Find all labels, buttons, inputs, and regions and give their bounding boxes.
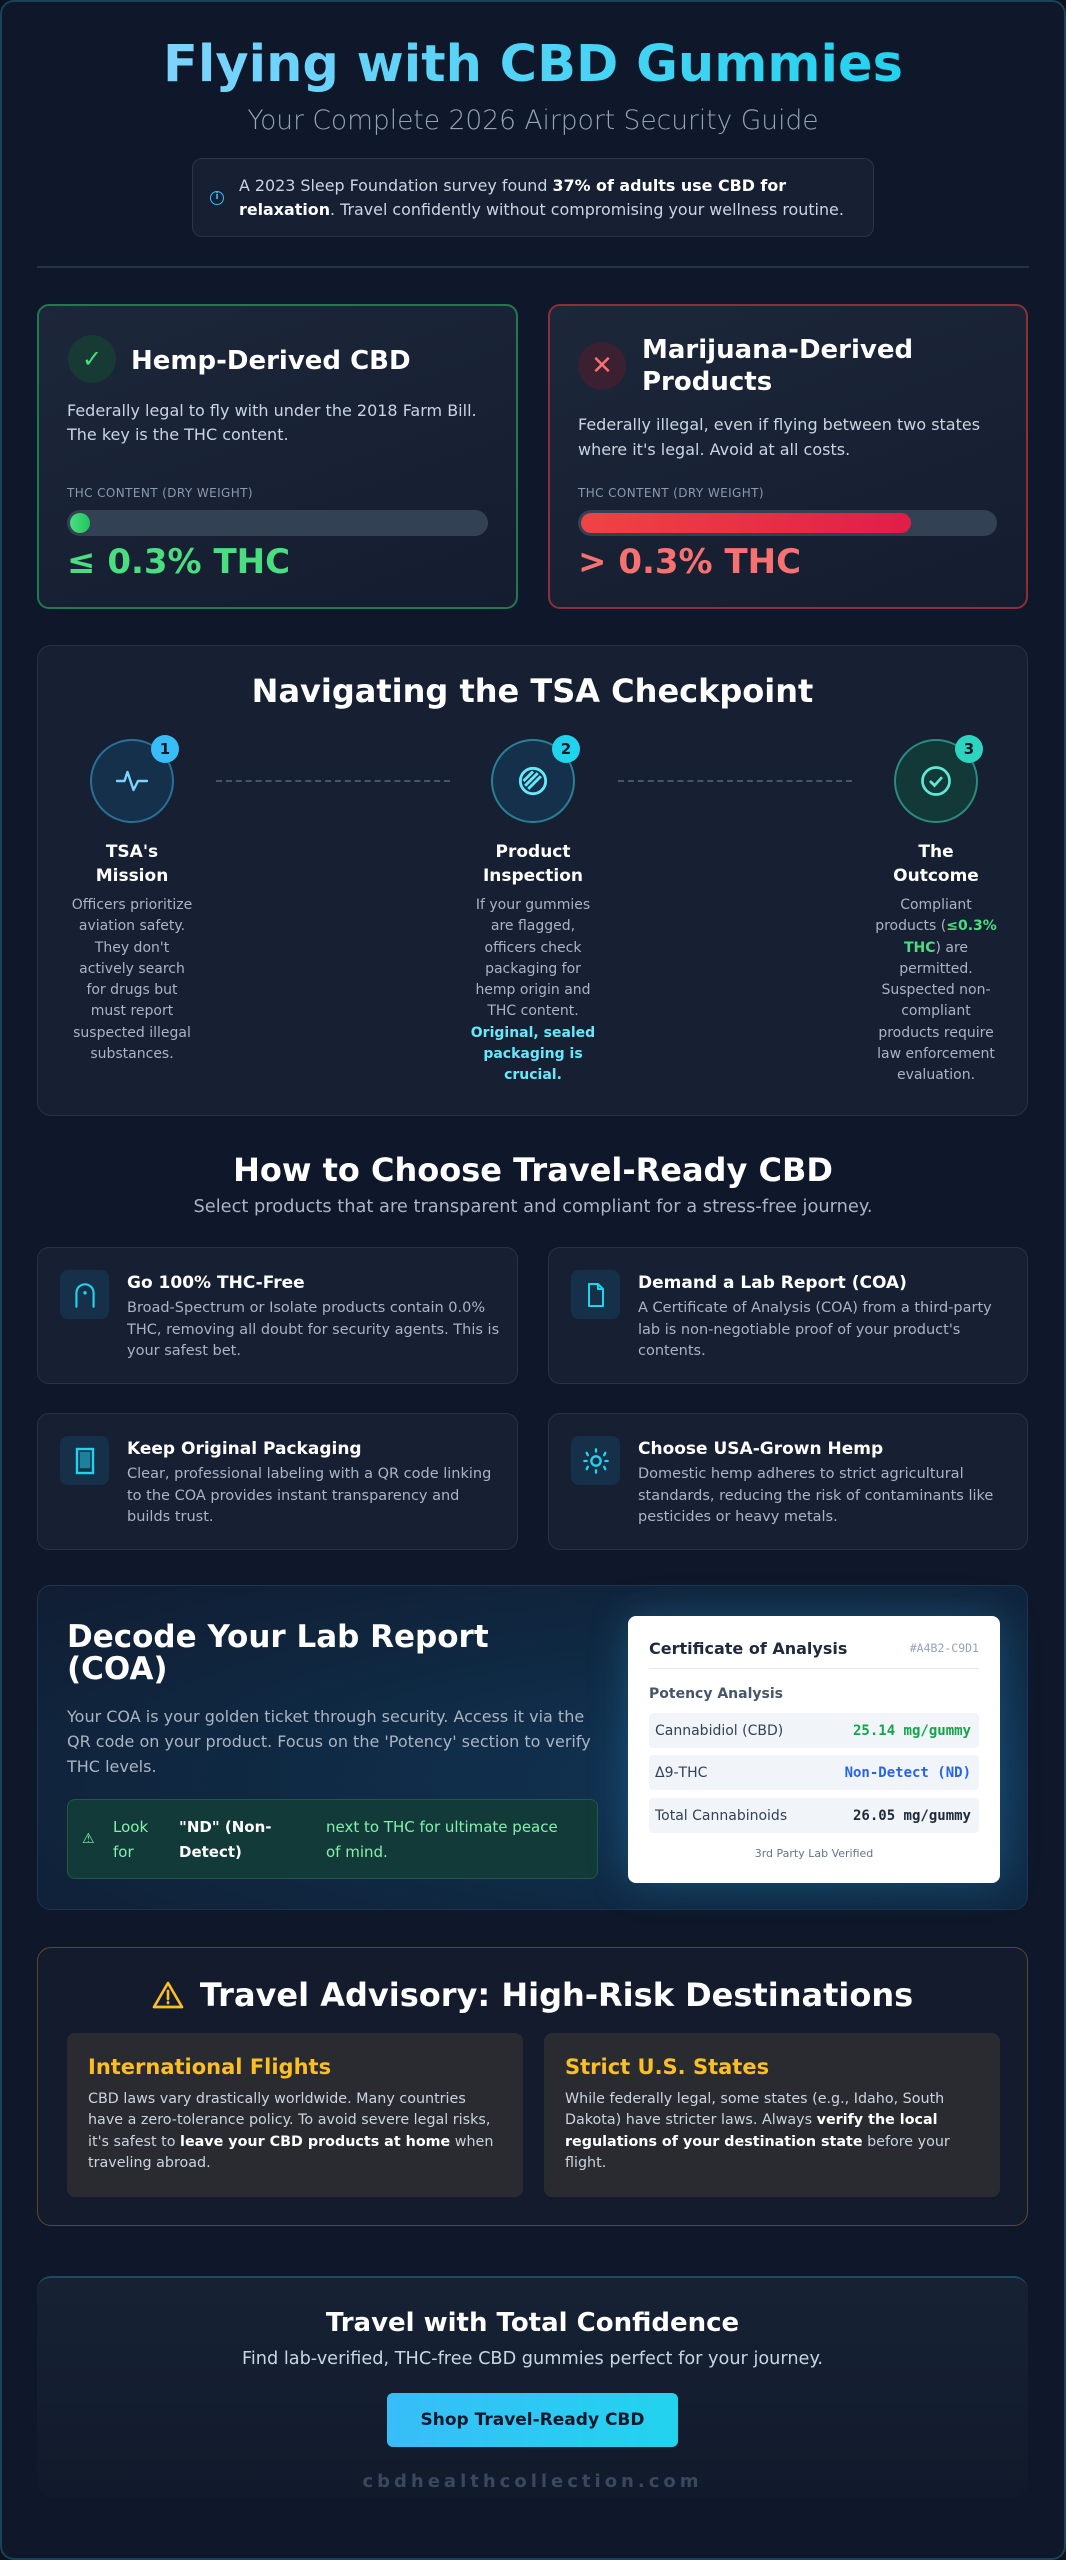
text: QR code on your product. Focus on the 'Potency' section to verify: [67, 1732, 591, 1751]
text: builds trust.: [127, 1509, 214, 1525]
icon: check circle: [894, 739, 978, 823]
step text: They don't: [95, 940, 169, 956]
text: A Certificate of Analysis (COA) from a third-party: [638, 1300, 992, 1316]
subheading: Select products that are transparent and compliant for a stress-free journey.: [193, 1196, 872, 1217]
card: packaging: [37, 1413, 518, 1550]
title: Demand a Lab Report (COA): [638, 1273, 907, 1293]
step text: suspected illegal: [73, 1025, 191, 1041]
icon: check: [68, 335, 116, 383]
badge 2: [552, 735, 580, 763]
callout: ND: "ND" (Non-: [179, 1818, 271, 1836]
text: lab is non-negotiable proof of your product's: [638, 1322, 960, 1338]
step 3: [875, 735, 997, 1083]
button: Shop Travel-Ready CBD: [420, 2410, 644, 2430]
heading: [67, 1619, 489, 1686]
info text: relaxation. Travel confidently without compromising your wellness routine.: [239, 200, 844, 219]
label: THC CONTENT (DRY WEIGHT): [67, 486, 253, 500]
label: THC CONTENT (DRY WEIGHT): [578, 486, 764, 500]
badge 3: [955, 735, 983, 763]
step text: Original, sealed: [471, 1025, 595, 1041]
box: strict states: Strict U.S. States: [565, 2055, 769, 2079]
box: strict states: Dakota) have stricter laws. Always verify the local: [565, 2112, 938, 2128]
COA card: 26.05 mg/gummy: [853, 1808, 971, 1824]
step text: THC content.: [487, 1003, 579, 1019]
panel: TSA checkpoint: [37, 645, 1028, 1116]
step text: products (≤0.3%: [875, 918, 997, 934]
value: > 0.3% THC: [578, 542, 801, 582]
step text: packaging for: [485, 961, 581, 977]
icon: inspection: [491, 739, 575, 823]
heading: Decode Your Lab Report: [67, 1619, 489, 1655]
step text: [72, 897, 192, 1062]
icon: info: i: [215, 192, 219, 202]
text: your safest bet.: [127, 1343, 241, 1359]
step text: Compliant: [900, 897, 972, 913]
panel: call to action: [37, 2276, 1028, 2497]
COA card: Cannabidiol (CBD): [655, 1722, 783, 1738]
step 2: [471, 735, 595, 1083]
text: [638, 1300, 992, 1359]
step title: Product: [496, 842, 570, 862]
text: Domestic hemp adheres to strict agricultural: [638, 1466, 964, 1482]
COA card: Certificate of Analysis: [649, 1639, 847, 1658]
badge 1: 1: [160, 740, 170, 758]
icon: [60, 1436, 109, 1485]
text: Find lab-verified, THC-free CBD gummies perfect for your journey.: [242, 2349, 823, 2369]
icon: warning: [152, 1982, 184, 2008]
step text: Suspected non-: [881, 982, 991, 998]
text: contents.: [638, 1343, 706, 1359]
step text: [471, 897, 595, 1083]
COA card: [628, 1616, 1000, 1883]
COA card: Non-Detect (ND): [845, 1764, 971, 1780]
box: international: traveling abroad.: [88, 2155, 211, 2171]
title: Keep Original Packaging: [127, 1439, 362, 1459]
text: where it's legal. Avoid at all costs.: [578, 440, 850, 459]
icon: check: ✓: [82, 345, 102, 373]
value: ≤ 0.3% THC: [67, 542, 290, 582]
step text: THC) are: [904, 940, 968, 956]
callout: ND: Look: [113, 1818, 148, 1836]
box: international: International Flights: [88, 2055, 331, 2079]
panel: decode lab report: [37, 1585, 1028, 1910]
callout: ND: [67, 1799, 598, 1879]
callout: ND: of mind.: [326, 1843, 388, 1861]
arrow: dashed 1: [216, 780, 450, 782]
box: international: have a zero-tolerance policy. To avoid severe legal risks,: [88, 2112, 490, 2128]
title: Go 100% THC-Free: [127, 1273, 305, 1293]
box: international: CBD laws vary drastically worldwide. Many countries: [88, 2091, 466, 2107]
COA card: 3rd Party Lab Verified: [755, 1847, 873, 1860]
step title: [483, 842, 583, 886]
text: Clear, professional labeling with a QR code linking: [127, 1466, 491, 1482]
box: strict states: flight.: [565, 2155, 606, 2171]
subtitle: Your Complete 2026 Airport Security Guide: [247, 105, 819, 136]
text: Your COA is your golden ticket through security. Access it via the: [67, 1707, 584, 1726]
step text: Officers prioritize: [72, 897, 192, 913]
step text: evaluation.: [897, 1067, 975, 1083]
heading: Travel Advisory: High-Risk Destinations: [200, 1976, 913, 2014]
step title: TSA's: [106, 842, 158, 862]
panel: travel advisory: [37, 1947, 1028, 2226]
step text: packaging is: [483, 1046, 583, 1062]
COA card: 25.14 mg/gummy: [853, 1722, 971, 1738]
heading: [642, 335, 913, 397]
card: lab report: [548, 1247, 1028, 1384]
step text: substances.: [90, 1046, 174, 1062]
step text: are flagged,: [491, 918, 575, 934]
step text: for drugs but: [86, 982, 178, 998]
text: to the COA provides instant transparency and: [127, 1488, 459, 1504]
badge 2: 2: [561, 740, 571, 758]
heading: Hemp-Derived CBD: [131, 346, 411, 376]
step text: [875, 897, 997, 1083]
icon: [571, 1436, 620, 1485]
box: strict states: [544, 2033, 1000, 2197]
icon: warning: ⚠: [82, 1831, 95, 1847]
step text: officers check: [485, 940, 581, 956]
bar: thc high: [578, 510, 997, 536]
info text: A 2023 Sleep Foundation survey found 37% of adults use CBD for: [239, 176, 786, 195]
COA card: Total Cannabinoids: [655, 1808, 787, 1824]
box: international: [67, 2033, 523, 2197]
COA card: #A4B2-C9D1: [910, 1641, 979, 1655]
step title: Outcome: [893, 866, 979, 886]
step title: [96, 842, 168, 886]
text: [127, 1466, 491, 1525]
step title: [893, 842, 979, 886]
icon: x: ✕: [591, 351, 613, 381]
box: strict states: While federally legal, some states (e.g., Idaho, South: [565, 2091, 944, 2107]
icon: [571, 1270, 620, 1319]
step text: aviation safety.: [79, 918, 185, 934]
heading: Marijuana-Derived: [642, 335, 913, 365]
panel: hemp-derived CBD: [37, 304, 518, 609]
box: strict states: regulations of your destination state before your: [565, 2134, 950, 2150]
card: THC-free: [37, 1247, 518, 1384]
text: [638, 1466, 993, 1525]
text: Federally illegal, even if flying between two states: [578, 415, 980, 434]
text: Broad-Spectrum or Isolate products contain 0.0%: [127, 1300, 485, 1316]
text: pesticides or heavy metals.: [638, 1509, 838, 1525]
step text: permitted.: [899, 961, 973, 977]
heading: how to choose: How to Choose Travel-Ready CBD: [233, 1151, 833, 1189]
text: THC, removing all doubt for security agents. This is: [127, 1322, 499, 1338]
step title: Inspection: [483, 866, 583, 886]
icon: info: [210, 191, 224, 205]
COA card: Δ9-THC: [655, 1764, 707, 1780]
heading: Products: [642, 367, 772, 397]
info text: [239, 176, 844, 219]
step text: crucial.: [504, 1067, 562, 1083]
step text: hemp origin and: [475, 982, 591, 998]
title: Flying with CBD Gummies: [163, 35, 903, 94]
step text: actively search: [79, 961, 185, 977]
text: standards, reducing the risk of contaminants like: [638, 1488, 993, 1504]
icon: [60, 1270, 109, 1319]
step title: The: [918, 842, 954, 862]
COA card: Potency Analysis: [649, 1686, 783, 1702]
step title: Mission: [96, 866, 168, 886]
callout: ND: next to THC for ultimate peace: [326, 1818, 558, 1836]
text: [66, 1707, 591, 1776]
panel: marijuana-derived: [548, 304, 1028, 609]
text: The key is the THC content.: [67, 425, 289, 444]
text: Federally legal to fly with under the 2018 Farm Bill.: [67, 401, 477, 420]
bar: thc low: [67, 510, 488, 536]
button: [387, 2393, 678, 2447]
heading: (COA): [67, 1650, 168, 1686]
step text: If your gummies: [476, 897, 590, 913]
icon: pulse: [90, 739, 174, 823]
text: THC levels.: [67, 1757, 157, 1776]
card: USA hemp: [548, 1413, 1028, 1550]
heading: Travel with Total Confidence: [326, 2308, 739, 2338]
step 1: [72, 735, 192, 1062]
text: [66, 401, 477, 444]
icon: x: [578, 342, 626, 390]
text: [578, 415, 980, 459]
text: [126, 1300, 499, 1359]
heading: Navigating the TSA Checkpoint: [252, 672, 813, 710]
step text: must report: [91, 1003, 173, 1019]
arrow: dashed 2: [618, 780, 852, 782]
step text: law enforcement: [877, 1046, 995, 1062]
badge 3: 3: [964, 740, 974, 758]
box: international: it's safest to leave your CBD products at home when: [88, 2134, 493, 2150]
callout: ND: Detect): [179, 1843, 242, 1861]
step text: compliant: [901, 1003, 971, 1019]
badge 1: [151, 735, 179, 763]
footer url: cbdhealthcollection.com: [362, 2471, 703, 2492]
callout: ND: for: [113, 1843, 134, 1861]
step text: products require: [878, 1025, 994, 1041]
info callout: [192, 158, 874, 237]
title: Choose USA-Grown Hemp: [638, 1439, 883, 1459]
